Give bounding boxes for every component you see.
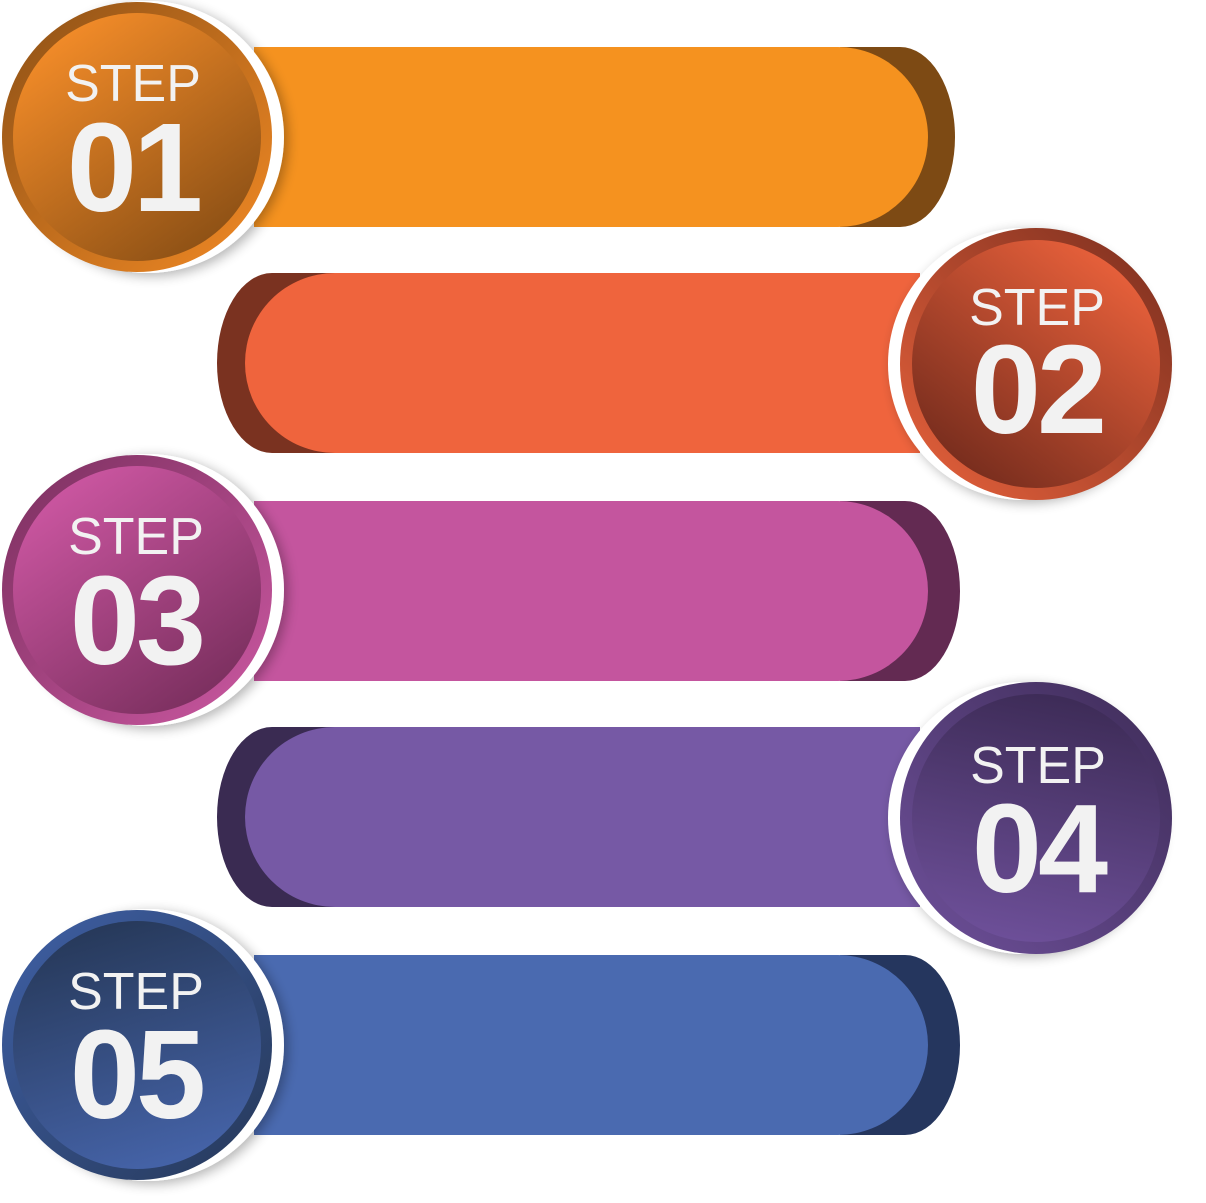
badge 01 [2,1,284,273]
badge 04: STEP [970,737,1106,795]
badge 02: 02 [971,319,1103,460]
badge 03: STEP [68,508,204,566]
badge 02: STEP [969,279,1105,337]
badge 01: 01 [67,97,200,238]
step 02 [217,228,1172,500]
step 01 [2,1,955,273]
badge 05: STEP [68,963,204,1021]
step 05 [2,909,960,1181]
badge 01: STEP [65,55,201,113]
badge 05 [2,909,284,1181]
badge 05: 05 [70,1004,203,1145]
badge 03 [2,454,284,726]
badge 04 [888,682,1172,954]
badge 04: 04 [972,778,1108,919]
bar 01 [254,47,955,227]
bar 02 [217,273,920,453]
bar 03 [254,501,960,681]
badge 03: 03 [70,550,202,691]
badge 02 [888,228,1172,500]
step 04 [217,682,1172,954]
step 03 [2,454,960,726]
bar 04 [217,727,920,907]
bar 05 [254,955,960,1135]
